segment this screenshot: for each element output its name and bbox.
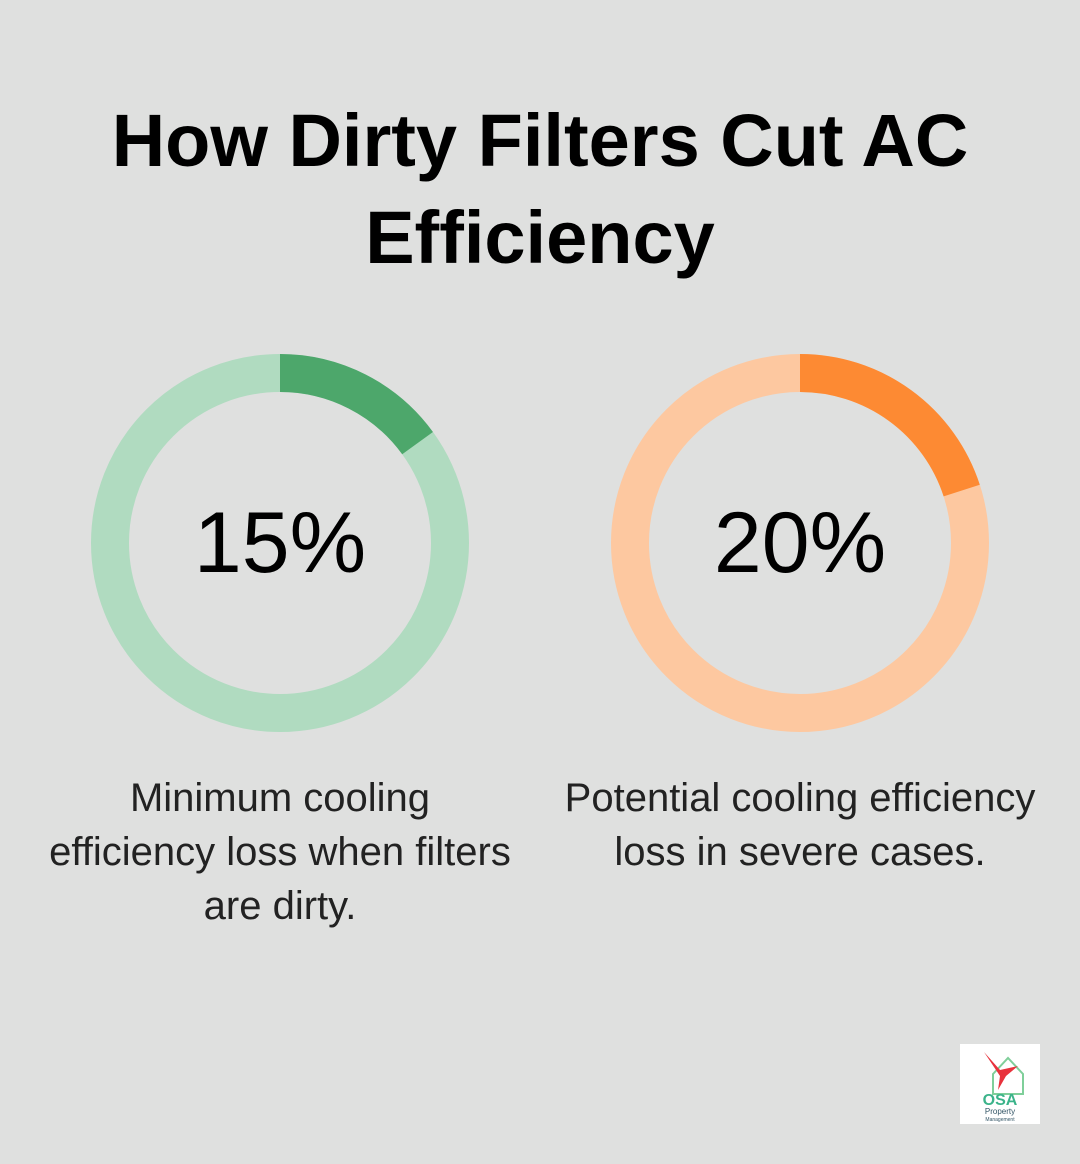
- logo: Property: [985, 1107, 1015, 1116]
- title: [112, 99, 968, 279]
- text: right description: [565, 776, 1036, 874]
- logo: Management: [985, 1117, 1015, 1123]
- logo: OSA: [983, 1092, 1018, 1109]
- text: left description: are dirty.: [204, 884, 356, 928]
- text: right description: loss in severe cases.: [614, 830, 986, 874]
- title: How Dirty Filters Cut AC: [112, 99, 968, 182]
- chart: 15% donut: [91, 354, 469, 732]
- chart: 20% donut: [611, 354, 989, 732]
- chart: 15% donut: 15%: [194, 495, 366, 591]
- text: left description: Minimum cooling: [130, 776, 430, 820]
- chart: 20% donut: 20%: [714, 495, 886, 591]
- text: left description: efficiency loss when filters: [49, 830, 511, 874]
- title: Efficiency: [365, 196, 715, 279]
- text: left description: [49, 776, 511, 928]
- text: right description: Potential cooling efficiency: [565, 776, 1035, 820]
- logo: [960, 1044, 1040, 1124]
